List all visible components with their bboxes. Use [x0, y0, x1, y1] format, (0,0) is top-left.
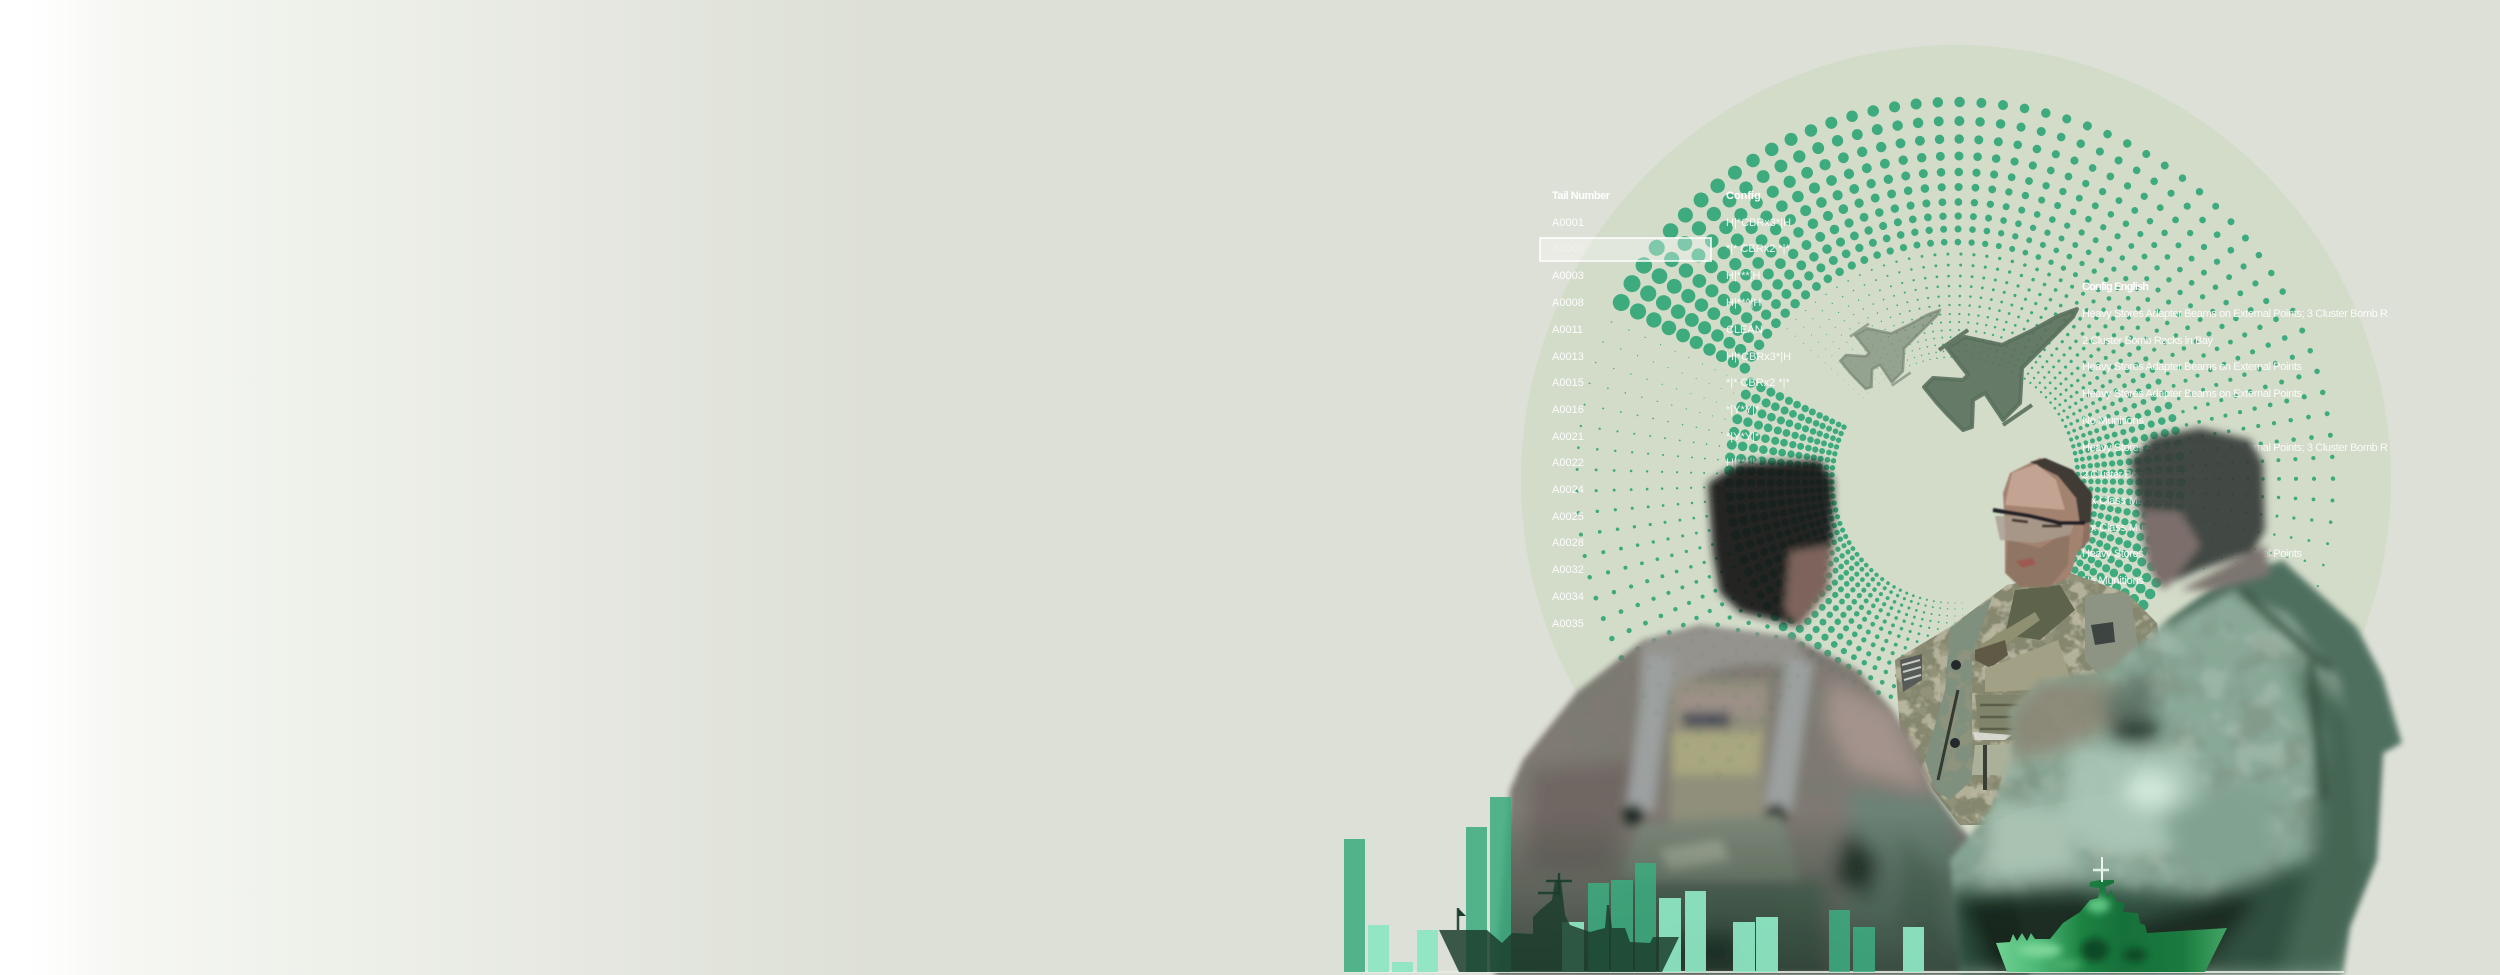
table column: config english: 2 Cluster Bomb Racks in Bay: [2082, 335, 2214, 347]
table column: tail number: A0028: [1552, 537, 1584, 549]
table column: tail number: A0008: [1552, 297, 1584, 309]
table column: config: *|* CBRx2 *|*: [1726, 243, 1791, 255]
chart: baseline: [1344, 971, 2344, 973]
table column: config: Config: [1726, 190, 1761, 202]
bar chart: [1344, 797, 1924, 972]
table column: config english: Heavy Stores Adapter Beams on External Points: [2082, 548, 2302, 560]
table column: tail number: A0013: [1552, 351, 1584, 363]
selected table row highlight: [1540, 238, 1711, 261]
left soldier head: [1708, 460, 1833, 627]
table column: tail number: [1552, 190, 1611, 630]
table column: tail number: A0025: [1552, 511, 1584, 523]
photo: blurred soldier at left: [1480, 460, 2040, 975]
table column: config english: 1 x Class Munition in Bay: [2082, 522, 2202, 534]
table column: tail number: A0034: [1552, 591, 1584, 603]
officer head: [1993, 458, 2092, 587]
icon: green warship silhouette: [1990, 857, 2230, 975]
officer torso: [1895, 573, 2158, 825]
table column: config english: Config English: [2082, 281, 2149, 293]
table column: tail number: A0002: [1552, 243, 1584, 255]
table column: config: H|*CBRx3*|H: [1726, 351, 1791, 363]
table column: config english: Heavy Stores Adapter Beams on External Points; 3 Cluster Bomb R: [2082, 308, 2388, 320]
photo: blurred soldier at right: [1950, 428, 2410, 975]
table column: tail number: A0003: [1552, 270, 1584, 282]
table column: config: *|Y*Y|*: [1726, 404, 1760, 416]
table column: config: CLEAN: [1726, 484, 1763, 496]
table column: config english: 1 x Class Munition in Bay: [2082, 495, 2202, 507]
table column: tail number: A0021: [1552, 431, 1584, 443]
table column: config english: No Munitions: [2082, 575, 2144, 587]
table column: tail number: A0022: [1552, 457, 1584, 469]
table column: config: *|Y*Y|*: [1726, 431, 1760, 443]
table column: config: H|***|H: [1726, 457, 1761, 469]
table column: config english: Heavy Stores Adapter Beams on External Points; 3 Cluster Bomb R: [2082, 442, 2388, 454]
table column: config english: 2 Cluster Bomb Racks in Bay: [2082, 469, 2214, 481]
icon: dark warship silhouette: [1439, 873, 1679, 972]
table column: config: H|**^|H: [1726, 297, 1761, 309]
right soldier head: [2130, 428, 2270, 590]
icon: large fighter jet: [1924, 309, 2077, 430]
table column: config: *|* CBRx2 *|*: [1726, 377, 1791, 389]
table column: config: [1726, 190, 1791, 496]
table column: config: H|*CBRx3*|H: [1726, 217, 1791, 229]
photo: officer in centre: [1895, 457, 2158, 825]
table column: tail number: A0001: [1552, 217, 1584, 229]
right soldier body: [1950, 550, 2410, 975]
table column: config english: No Munitions: [2082, 415, 2144, 427]
table column: tail number: A0011: [1552, 324, 1583, 336]
table column: tail number: Tail Number: [1552, 190, 1611, 202]
table column: config: H|***|H: [1726, 270, 1761, 282]
panel: large circle: [1521, 45, 2391, 915]
table column: config: CLEAN: [1726, 324, 1763, 336]
table column: tail number: A0032: [1552, 564, 1584, 576]
halftone dot pattern: [1577, 102, 2333, 775]
table column: tail number: A0016: [1552, 404, 1584, 416]
left soldier body: [1480, 610, 2040, 975]
table column: config english: Heavy Stores Adapter Beams on External Points: [2082, 361, 2302, 373]
table column: tail number: A0015: [1552, 377, 1584, 389]
table column: tail number: A0035: [1552, 618, 1584, 630]
table column: config english: Heavy Stores Adapter Beams on External Points: [2082, 388, 2302, 400]
table column: tail number: A0024: [1552, 484, 1584, 496]
icon: small fighter jet: [1840, 310, 1940, 389]
table column: config english: [2082, 281, 2388, 587]
